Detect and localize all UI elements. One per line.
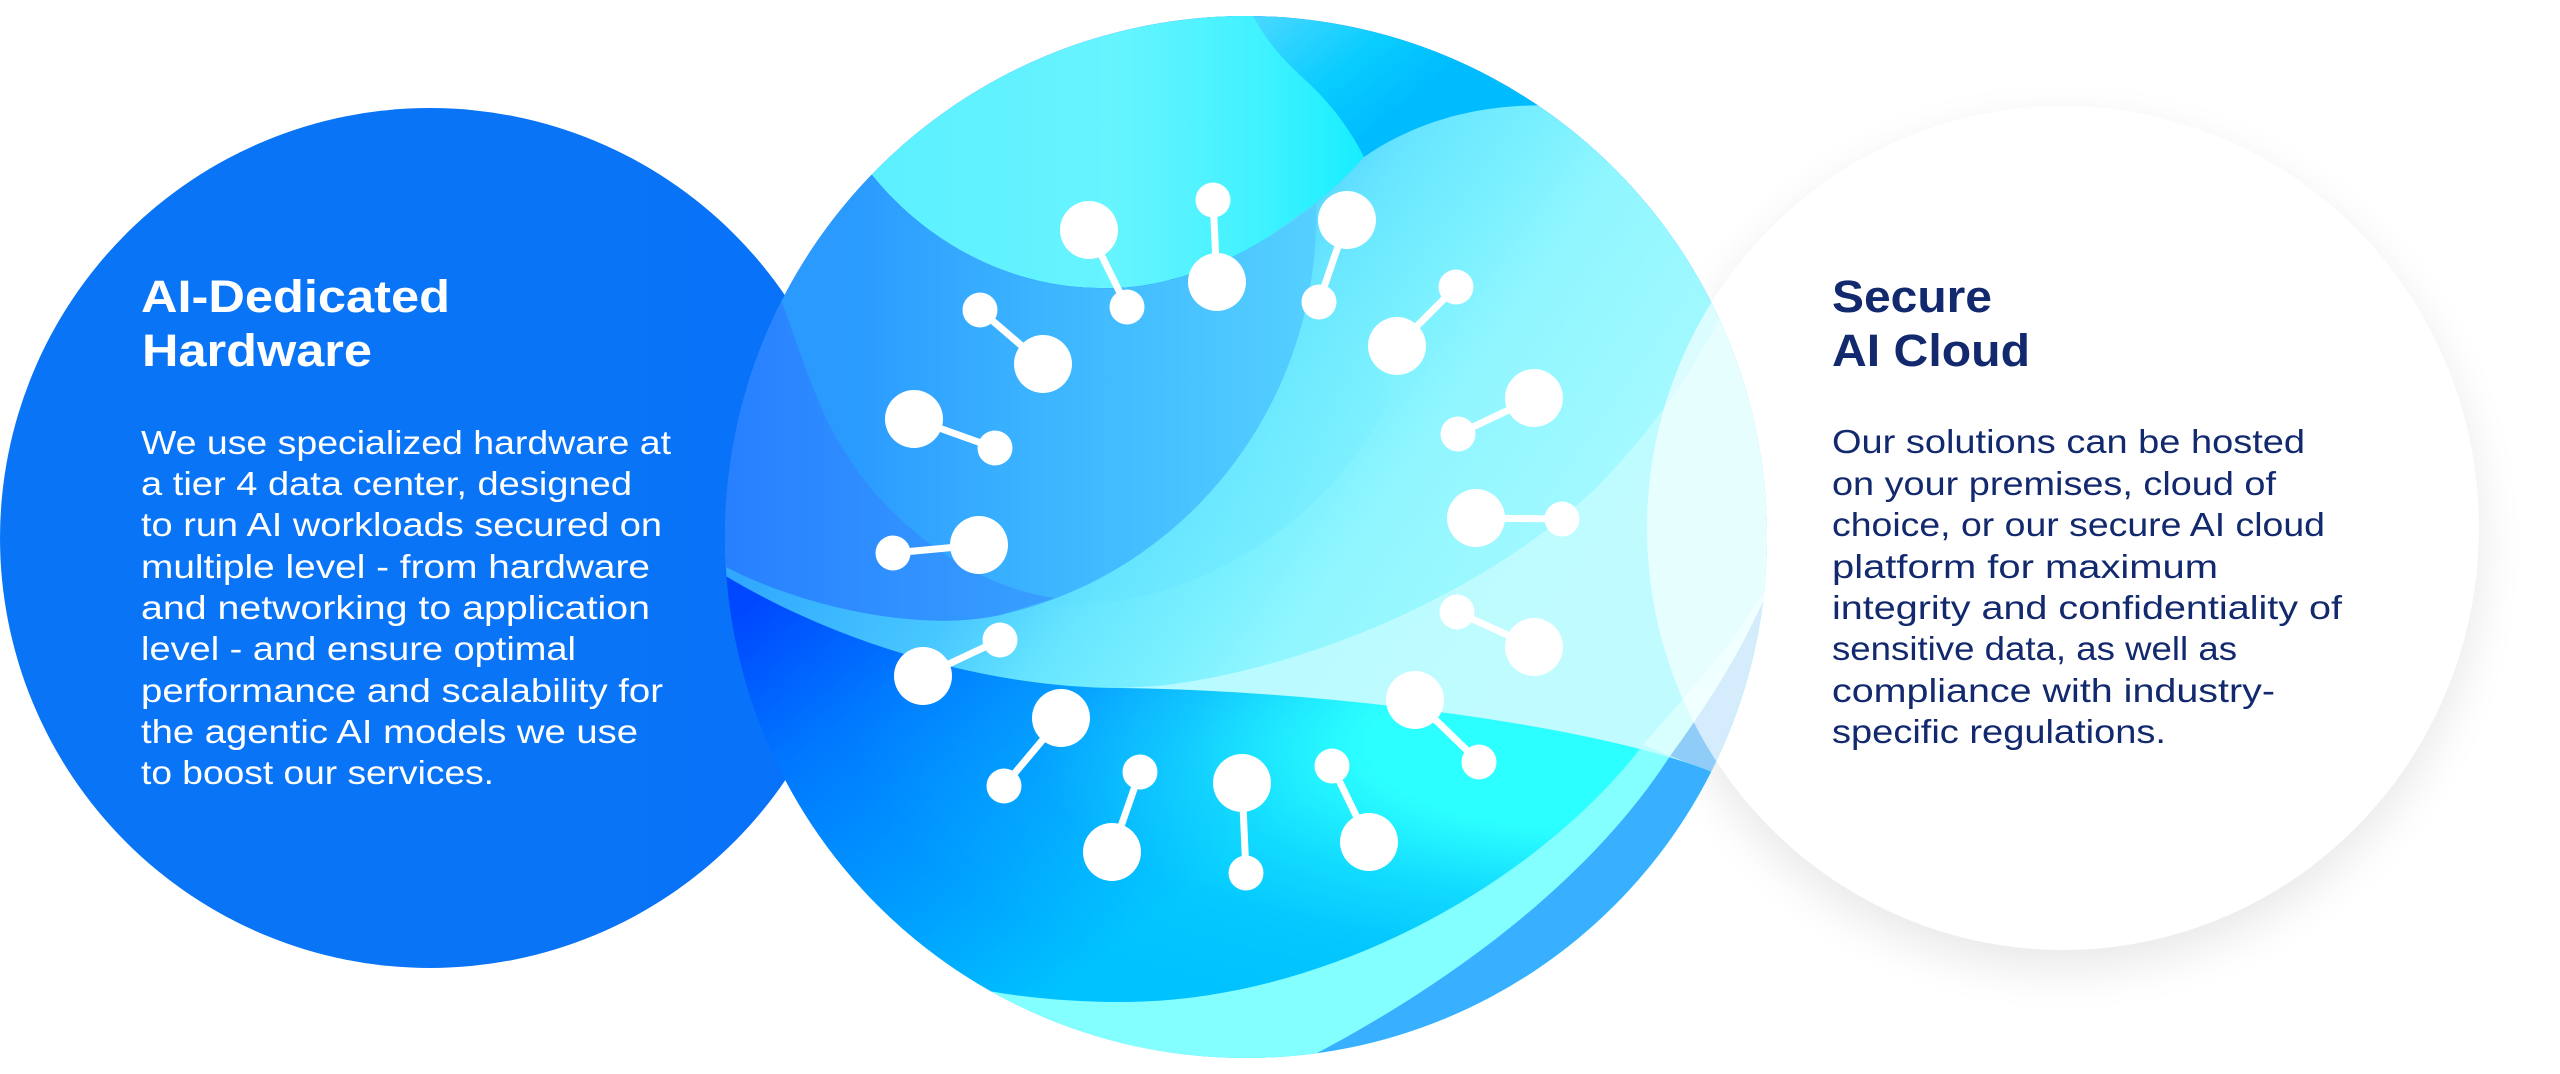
text block: hardware description: a tier 4 data center, designed [141, 465, 632, 502]
heading: AI-Dedicated Hardware [141, 271, 450, 376]
panel: right circle shadow [1647, 124, 2479, 968]
icon: molecule 16 [962, 292, 1072, 393]
panel: left circle background [0, 108, 860, 968]
text block: cloud description: specific regulations. [1832, 713, 2166, 750]
icon: molecule 2 [1188, 182, 1246, 311]
panel: translucent overlap of right circle on sphere [1647, 302, 1767, 762]
icon: molecule 15 [885, 390, 1012, 466]
text block: hardware description: level - and ensure optimal [141, 630, 576, 667]
text block: cloud description: platform for maximum [1832, 548, 2218, 585]
icon: molecule 12 [986, 689, 1090, 804]
heading: Secure AI Cloud: AI Cloud [1832, 325, 2030, 376]
text block: cloud description: on your premises, cloud of [1832, 465, 2277, 502]
text block: hardware description: to run AI workloads secured on [141, 506, 662, 543]
icon: molecule 3 [1302, 191, 1376, 320]
icon: molecule 7 [1440, 594, 1563, 676]
heading: Secure AI Cloud: Secure [1832, 271, 1992, 322]
icon: molecule 5 [1440, 369, 1563, 452]
text block: cloud description: sensitive data, as well as [1832, 630, 2237, 667]
heading: AI-Dedicated Hardware: Hardware [142, 325, 372, 376]
text block: hardware description: We use specialized hardware at [141, 424, 671, 461]
text block: hardware description: multiple level - from hardware [141, 548, 650, 585]
text block: hardware description: to boost our services. [141, 754, 494, 791]
icon: molecule 9 [1213, 754, 1271, 890]
panel: central gradient sphere [700, 0, 1800, 1074]
icon: molecule 6 [1447, 489, 1580, 547]
icon: molecule 13 [894, 622, 1018, 705]
text block: hardware description: the agentic AI models we use [141, 713, 638, 750]
text block: cloud description [1832, 423, 2343, 750]
molecule ring icons [876, 182, 1580, 890]
text block: cloud description: choice, or our secure AI cloud [1832, 506, 2325, 543]
icon: molecule 11 [1083, 754, 1158, 881]
text block: hardware description: performance and scalability for [141, 672, 663, 709]
icon: molecule 8 [1386, 671, 1496, 780]
heading: AI-Dedicated Hardware: AI-Dedicated [141, 271, 450, 322]
text block: cloud description: integrity and confidentiality of [1832, 589, 2343, 626]
icon: molecule 10 [1314, 748, 1398, 871]
panel: right circle background [1647, 106, 2479, 950]
text block: hardware description: and networking to application [141, 589, 650, 626]
heading: Secure AI Cloud [1832, 271, 2030, 376]
text block: hardware description [141, 424, 671, 791]
text block: cloud description: Our solutions can be hosted [1832, 423, 2305, 460]
icon: molecule 14 [876, 516, 1008, 574]
icon: molecule 4 [1368, 270, 1474, 375]
icon: molecule 1 [1060, 201, 1144, 324]
text block: cloud description: compliance with industry- [1832, 672, 2275, 709]
